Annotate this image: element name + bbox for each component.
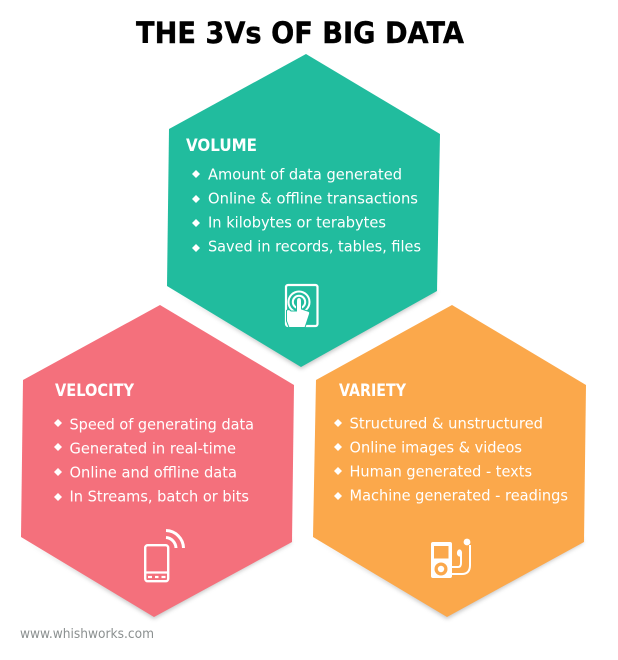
panel: velocity: [21, 305, 294, 619]
velocity bullet list: Generated in real-time: [70, 440, 236, 458]
volume bullet list: Amount of data generated: [208, 166, 402, 184]
volume heading: VOLUME: [186, 136, 257, 155]
velocity hexagon: [21, 305, 294, 617]
icon: music player with earphones: [431, 539, 470, 578]
variety bullet list: [334, 414, 568, 504]
icon: touch tablet: [286, 285, 318, 328]
variety heading: VARIETY: [339, 381, 407, 400]
volume bullet list: Saved in records, tables, files: [208, 238, 421, 256]
velocity bullet list: Speed of generating data: [70, 416, 254, 434]
variety bullet list: Online images & videos: [350, 438, 522, 456]
panel: volume: [167, 54, 440, 369]
volume hexagon: [167, 54, 440, 367]
variety hexagon: [313, 305, 586, 617]
volume bullet list: In kilobytes or terabytes: [208, 214, 386, 232]
velocity bullet list: Online and offline data: [70, 464, 237, 482]
volume bullet list: Online & offline transactions: [208, 190, 418, 208]
variety bullet list: Human generated - texts: [350, 462, 532, 480]
volume bullet list: [192, 166, 421, 256]
footer url: www.whishworks.com: [20, 626, 154, 642]
variety bullet list: Structured & unstructured: [350, 414, 543, 432]
velocity bullet list: In Streams, batch or bits: [70, 488, 249, 506]
panel: variety: [313, 305, 586, 619]
title: THE 3Vs OF BIG DATA: [136, 16, 464, 50]
velocity bullet list: [54, 416, 254, 506]
variety bullet list: Machine generated - readings: [350, 486, 568, 504]
velocity heading: VELOCITY: [55, 381, 135, 400]
icon: smartphone with signal: [145, 530, 184, 581]
